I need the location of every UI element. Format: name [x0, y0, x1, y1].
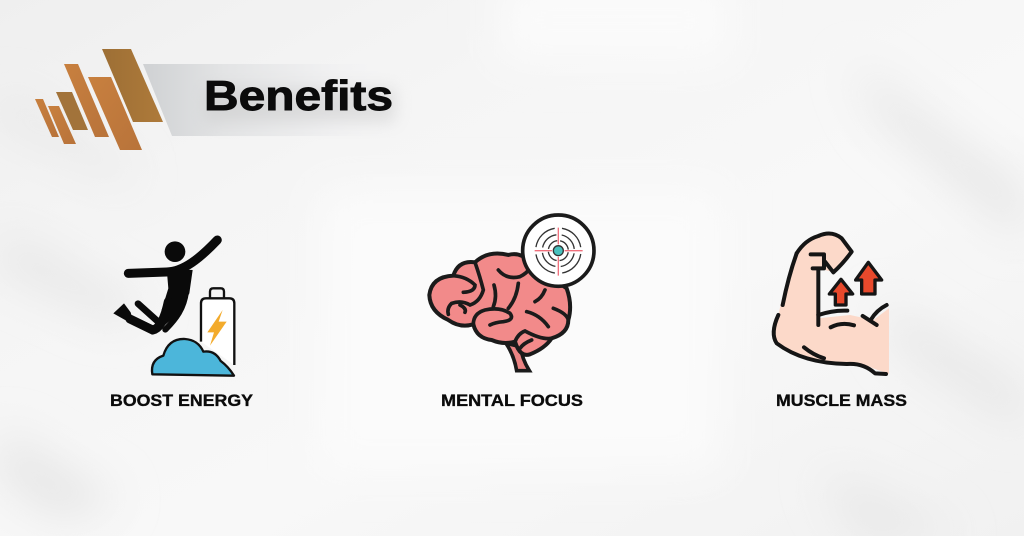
icon: small arrow — [829, 279, 853, 305]
title: Benefits — [204, 72, 393, 119]
icon: flexed arm with arrows — [774, 233, 889, 374]
icon: jumping figure with battery and cloud — [113, 240, 234, 376]
label: muscle mass: MUSCLE MASS — [776, 392, 907, 410]
label: mental focus: MENTAL FOCUS — [441, 392, 583, 410]
icon: large arrow — [856, 262, 882, 294]
icon: battery — [201, 288, 234, 365]
icon: brain — [429, 254, 570, 371]
icon: cloud — [152, 339, 234, 376]
icon: arm — [774, 233, 889, 374]
icon: brain with target — [429, 215, 594, 371]
label: boost energy: BOOST ENERGY — [110, 392, 253, 410]
icon: target — [523, 215, 594, 286]
banner: title band — [143, 64, 415, 136]
icon: jumping figure — [113, 240, 217, 330]
logo: copper bars — [35, 49, 163, 150]
